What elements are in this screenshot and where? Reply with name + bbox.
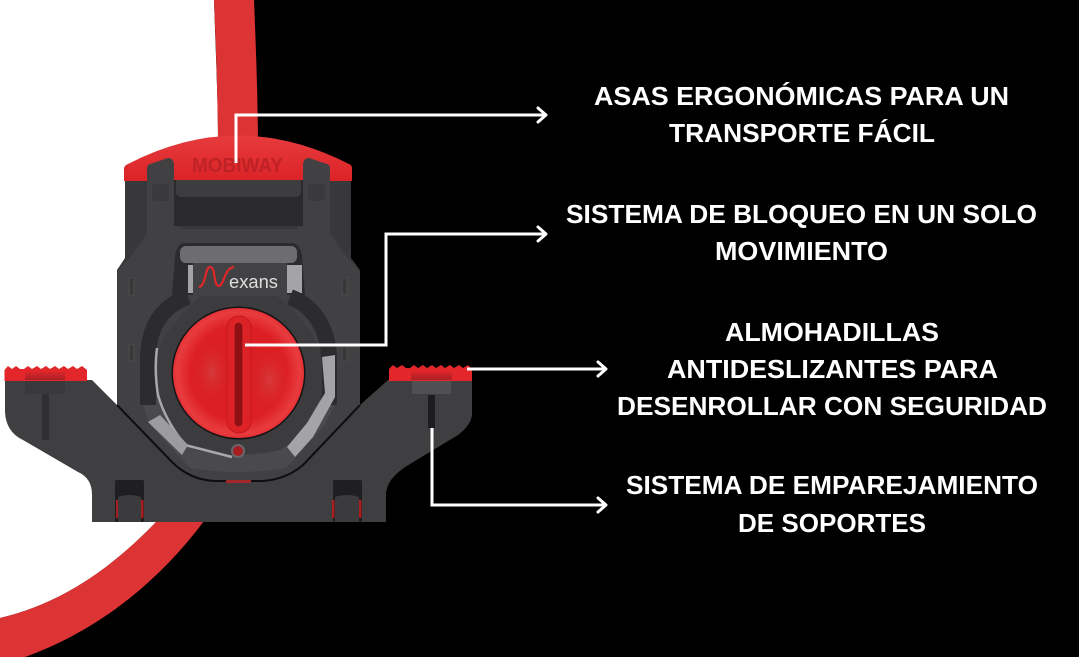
logo wave mark	[199, 267, 234, 287]
label: locking system: SISTEMA DE BLOQUEO EN UN SOLO	[566, 199, 1037, 229]
label: anti-slip pads	[617, 317, 1047, 421]
knob left highlight	[192, 338, 232, 406]
label: locking system: MOVIMIENTO	[715, 236, 888, 266]
indicator dot	[231, 444, 245, 458]
ring around knob	[141, 296, 337, 472]
arrow: locking system	[245, 227, 546, 345]
left anti-slip pad	[4, 366, 87, 381]
knob slot	[234, 322, 243, 427]
logo window frame	[172, 243, 305, 303]
right hinge	[332, 480, 362, 522]
bottom red clip	[226, 480, 251, 483]
arrow: handles	[236, 108, 546, 163]
V bracket and feet	[5, 380, 472, 522]
right pad shade	[411, 372, 452, 380]
knob right highlight	[248, 344, 292, 416]
label: anti-slip pads: ANTIDESLIZANTES PARA	[667, 354, 998, 384]
center panel	[193, 263, 287, 303]
label: handles: TRANSPORTE FÁCIL	[669, 118, 935, 148]
grey strip right	[287, 265, 302, 293]
inner disc	[158, 296, 322, 455]
left hinge	[115, 480, 144, 522]
handle recess	[174, 180, 303, 226]
arrow: bracket pairing	[432, 428, 606, 512]
grip band	[176, 180, 301, 197]
red top cap	[124, 136, 352, 181]
device: Mobiway reel holder	[4, 136, 472, 522]
label: handles	[594, 81, 1009, 148]
handle	[117, 158, 360, 482]
big grey segment left	[148, 415, 188, 455]
left foot block	[25, 380, 65, 394]
right anti-slip pad	[389, 365, 472, 381]
grey top strip	[180, 246, 297, 263]
label: bracket pairing: DE SOPORTES	[738, 508, 926, 538]
left pad shade	[25, 372, 65, 380]
black knob seat	[172, 306, 306, 440]
label: handles: ASAS ERGONÓMICAS PARA UN	[594, 81, 1009, 111]
left foot slot	[42, 394, 49, 440]
label: anti-slip pads: DESENROLLAR CON SEGURIDAD	[617, 391, 1047, 421]
lower lighter bowl	[141, 400, 337, 472]
label: anti-slip pads: ALMOHADILLAS	[725, 317, 939, 347]
small badge left	[152, 184, 169, 201]
bracket inner edge	[117, 405, 360, 481]
label: locking system	[566, 199, 1037, 266]
knob	[173, 308, 304, 438]
white edge sliver	[198, 312, 222, 323]
thin light strip	[156, 348, 232, 457]
knob ridge	[227, 316, 251, 433]
logo wordmark: exans	[229, 272, 278, 292]
small badge right	[308, 184, 325, 201]
background: white area	[0, 0, 218, 618]
label: bracket pairing	[626, 470, 1038, 538]
Nexans logo	[199, 267, 278, 292]
grey strip left	[188, 265, 193, 293]
main body	[117, 175, 360, 482]
label: bracket pairing: SISTEMA DE EMPAREJAMIENTO	[626, 470, 1038, 500]
cap wordmark: MOBIWAY	[192, 155, 284, 177]
big grey segment right	[287, 355, 335, 457]
red cable band	[0, 0, 258, 657]
dark arches	[148, 297, 329, 405]
right foot block	[412, 380, 451, 394]
right foot slot	[428, 395, 435, 428]
side slots	[129, 278, 347, 361]
arrow: anti-slip pads	[467, 362, 606, 376]
